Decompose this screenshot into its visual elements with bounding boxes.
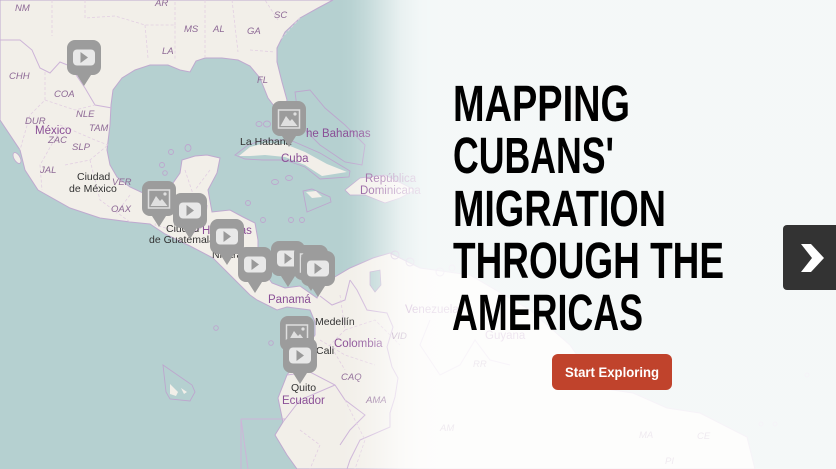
map labels: LA: [162, 46, 174, 57]
map labels: MS: [184, 24, 199, 35]
map labels: de Guatemala: [149, 234, 215, 246]
map labels: de México: [69, 183, 117, 195]
map labels: MA: [639, 430, 653, 441]
marker: video, Ecuador: [283, 338, 317, 384]
map labels: SC: [274, 10, 287, 21]
lake: [370, 270, 381, 292]
map labels: CAQ: [341, 372, 362, 383]
map labels: OAX: [111, 204, 132, 215]
title: MAPPING: [453, 75, 630, 132]
map labels: Cuba: [281, 153, 309, 165]
map labels: AM: [439, 423, 454, 434]
map labels: La Habana: [240, 136, 292, 148]
map labels: Panamá: [268, 294, 311, 306]
map labels: Ciudad: [166, 223, 199, 235]
start exploring button: Start Exploring: [565, 364, 659, 380]
white fade over the map: [340, 0, 836, 469]
map labels: GA: [247, 26, 261, 37]
map labels: Honduras: [202, 225, 252, 237]
map labels: JAL: [39, 165, 56, 176]
title: THROUGH THE: [453, 232, 724, 289]
marker: video, Darien: [301, 251, 335, 297]
map labels: CHH: [9, 71, 30, 82]
marker: video, Texas border: [67, 40, 101, 86]
map labels: FL: [257, 75, 268, 86]
start exploring button: [552, 354, 672, 390]
marker: photo, Darien: [294, 245, 328, 291]
map labels: República: [365, 173, 417, 185]
title: AMERICAS: [452, 284, 643, 341]
map labels: NLE: [76, 109, 95, 120]
map labels: AMA: [365, 395, 387, 406]
islands: Cuba, Jamaica, Hispaniola, Bahamas, Galapagos: [163, 90, 415, 401]
map labels: TAM: [89, 123, 108, 134]
map labels: VER: [112, 177, 132, 188]
marker: photo, Colombia: [280, 316, 314, 362]
title: [452, 75, 724, 341]
map labels: Quito: [291, 382, 316, 394]
map labels: COA: [54, 89, 75, 100]
title: CUBANS': [453, 127, 614, 184]
map labels: Guyana: [485, 330, 526, 342]
map markers: [67, 40, 335, 384]
small cays: [11, 121, 809, 426]
marker: photo, Havana: [272, 101, 306, 147]
map labels: VID: [391, 331, 407, 342]
map labels: Ecuador: [282, 395, 325, 407]
map labels: Ciudad: [77, 171, 110, 183]
map labels: Venezuela: [405, 304, 459, 316]
map labels: México: [35, 125, 71, 137]
map labels: he Bahamas: [306, 128, 371, 140]
map labels: Medellín: [315, 316, 355, 328]
marker: photo, Guatemala: [142, 181, 176, 227]
map labels: Colombia: [334, 338, 383, 350]
marker: video, Nicaragua: [210, 219, 244, 265]
map labels: NM: [15, 3, 30, 14]
marker: video, Panama: [271, 241, 305, 287]
marker: video, Honduras: [173, 193, 207, 239]
map labels: RR: [473, 359, 487, 370]
map labels: CE: [697, 431, 711, 442]
map labels: Dominicana: [360, 185, 421, 197]
country and state borders: [0, 0, 510, 469]
map labels: ZAC: [47, 135, 67, 146]
map labels: Nicaragua: [212, 249, 260, 261]
next arrow button: [783, 225, 836, 290]
map labels: SLP: [72, 142, 91, 153]
marker: video, Costa Rica: [238, 247, 272, 293]
map labels: DUR: [25, 116, 46, 127]
map labels: Cali: [316, 345, 334, 357]
title: MIGRATION: [453, 180, 666, 237]
map labels: PI: [665, 456, 674, 467]
map labels: AL: [212, 24, 225, 35]
